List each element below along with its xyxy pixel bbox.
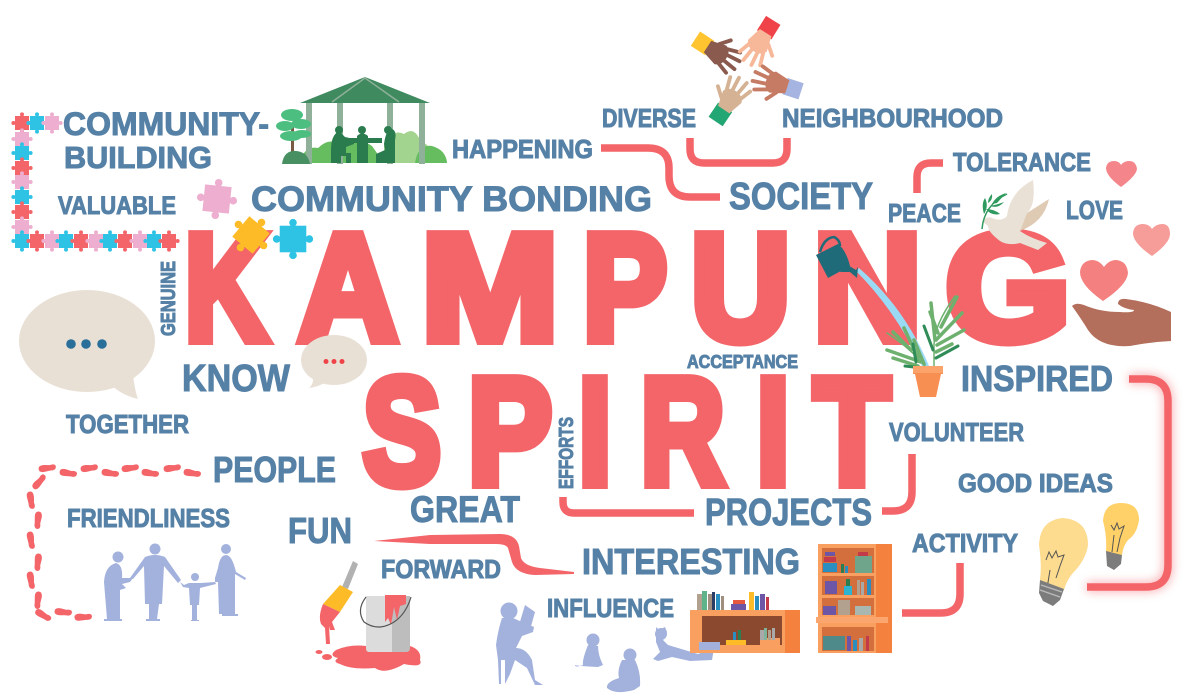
word: VALUABLE: VALUABLE	[58, 192, 176, 220]
icon: low book shelf	[690, 591, 800, 653]
title: SPIRIT: S	[363, 346, 441, 516]
word: TOGETHER: TOGETHER	[66, 409, 189, 439]
title: SPIRIT	[363, 346, 890, 516]
word: TOLERANCE: TOLERANCE	[953, 147, 1091, 177]
title: KAMPUNG: A	[298, 202, 398, 372]
icon: yellow puzzle piece	[223, 207, 279, 263]
title: KAMPUNG: G	[946, 202, 1070, 372]
icon: heart medium	[1133, 224, 1170, 256]
word: VOLUNTEER: VOLUNTEER	[889, 417, 1024, 447]
connector: volunteer to projects	[882, 454, 912, 511]
icon: potted plant	[887, 296, 964, 397]
word: FRIENDLINESS: FRIENDLINESS	[67, 503, 230, 533]
title: SPIRIT: R	[641, 346, 725, 516]
icon: large speech bubble	[19, 290, 155, 399]
word: INFLUENCE: INFLUENCE	[547, 593, 674, 623]
title: KAMPUNG	[185, 202, 1070, 372]
word: LOVE: LOVE	[1066, 195, 1123, 225]
icon: diverse hands	[689, 14, 805, 128]
word: PEACE: PEACE	[888, 198, 961, 228]
title: KAMPUNG: K	[185, 202, 267, 372]
title: KAMPUNG: U	[691, 202, 790, 372]
title: SPIRIT: I	[757, 346, 789, 516]
word: ACTIVITY: ACTIVITY	[912, 528, 1018, 558]
word: PROJECTS: PROJECTS	[705, 492, 872, 534]
icon: paint bucket and spill	[316, 595, 421, 671]
connector: efforts to projects	[563, 497, 694, 513]
icon: footprint trail	[26, 463, 201, 623]
icon: blue puzzle piece	[273, 219, 313, 259]
icon: heart small	[1106, 161, 1137, 187]
word: GREAT: GREAT	[410, 489, 520, 530]
icon: pink puzzle piece	[195, 177, 239, 221]
title: KAMPUNG: M	[422, 202, 558, 372]
word: COMMUNITY-BUILDING	[63, 106, 269, 175]
icon: dove with olive branch	[982, 180, 1049, 250]
title: KAMPUNG: P	[583, 202, 667, 372]
word: COMMUNITY-BUILDING: COMMUNITY-	[63, 106, 269, 142]
icon: puzzle border	[11, 112, 180, 252]
word: NEIGHBOURHOOD: NEIGHBOURHOOD	[782, 103, 1003, 133]
title: SPIRIT: I	[579, 346, 611, 516]
word: EFFORTS (vertical): EFFORTS	[556, 417, 578, 489]
word: HAPPENING: HAPPENING	[452, 136, 593, 164]
icon: watering can and water	[816, 237, 929, 366]
title: KAMPUNG: N	[814, 202, 922, 372]
word: FUN: FUN	[288, 510, 352, 551]
icon: light bulb large	[1039, 518, 1088, 606]
connector: inspired to ideas, glowing	[1087, 379, 1168, 587]
word: GOOD IDEAS: GOOD IDEAS	[958, 468, 1113, 498]
icon: heart large	[1080, 260, 1128, 301]
connector: peace to tolerance	[917, 163, 943, 193]
icon: giving hand	[1072, 299, 1171, 346]
word: SOCIETY: SOCIETY	[729, 176, 873, 218]
icon: light bulb small	[1103, 503, 1139, 570]
icon: gazebo with people	[276, 77, 447, 164]
connector: diverse to neighbourhood	[690, 138, 787, 163]
word: FORWARD: FORWARD	[381, 554, 501, 584]
word: GENUINE (vertical): GENUINE	[158, 261, 180, 336]
brush stroke connector	[374, 534, 574, 575]
icon: family silhouette	[104, 544, 246, 621]
icon: reading children silhouettes	[496, 602, 714, 692]
word: PEOPLE: PEOPLE	[213, 449, 336, 490]
word: INTERESTING: INTERESTING	[582, 541, 800, 582]
word: COMMUNITY BONDING: COMMUNITY BONDING	[251, 180, 652, 219]
icon: small speech bubble	[301, 335, 367, 388]
icon: tall bookcase	[816, 544, 892, 653]
icon: paint brush	[320, 561, 358, 644]
word: KNOW: KNOW	[182, 358, 290, 400]
title: SPIRIT: P	[468, 346, 552, 516]
word: DIVERSE: DIVERSE	[602, 103, 696, 133]
word: ACCEPTANCE: ACCEPTANCE	[687, 352, 798, 372]
connector: activity to bookcase	[902, 563, 960, 613]
title: SPIRIT: T	[814, 346, 890, 516]
word: COMMUNITY-BUILDING: BUILDING	[64, 140, 212, 175]
connector: happening to society	[601, 148, 720, 197]
word: INSPIRED: INSPIRED	[961, 358, 1113, 399]
